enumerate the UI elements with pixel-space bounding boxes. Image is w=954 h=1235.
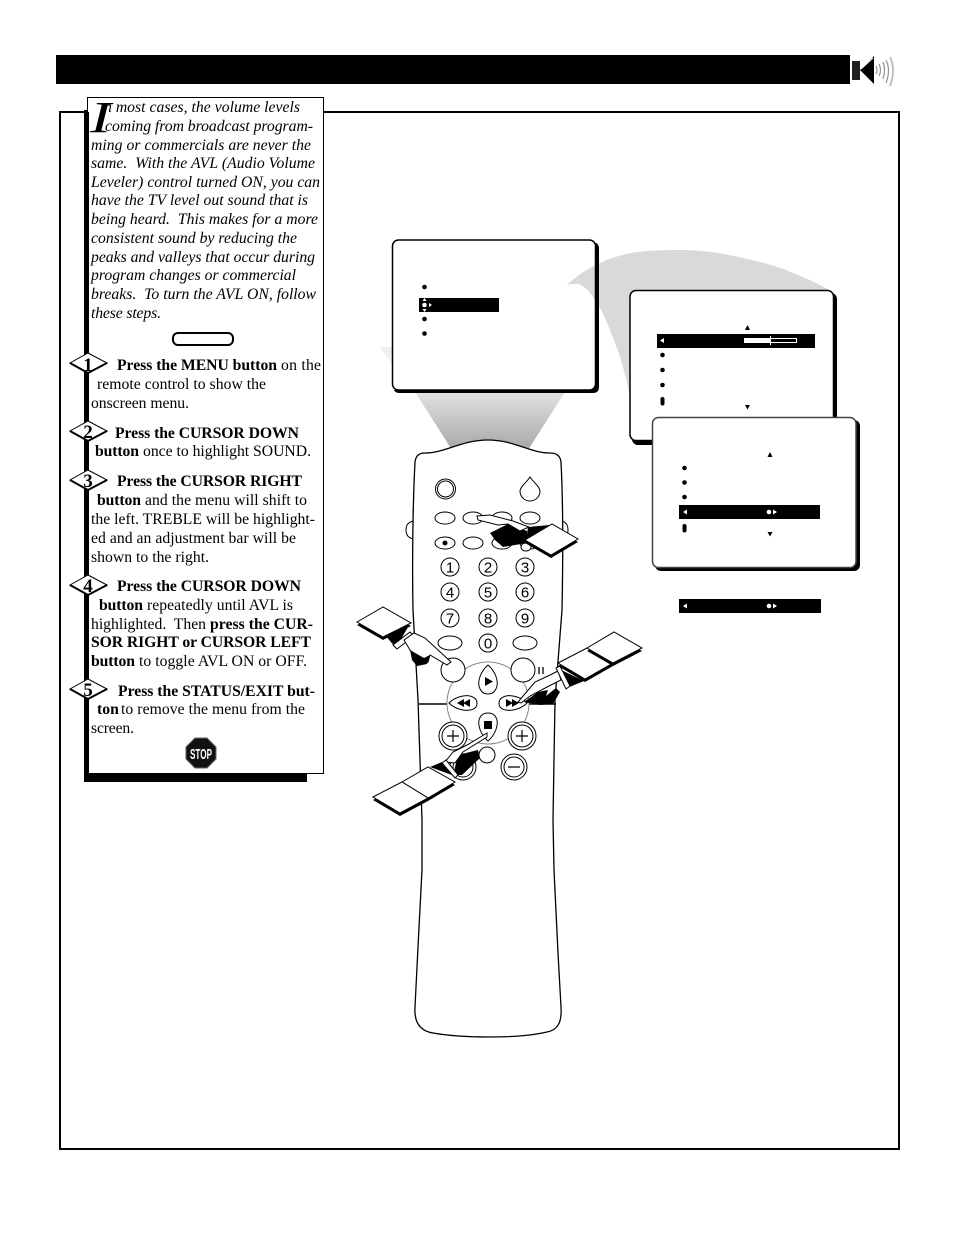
keypad digits [446,560,529,652]
step 3: Press the CURSOR RIGHT [117,473,303,490]
intro text: these steps. [91,305,161,322]
step 2: once to highlight SOUND. [143,443,311,460]
grey swoosh [567,250,832,430]
intro text [90,99,320,322]
keypad digits: 1 [446,560,454,576]
transport symbols [457,677,519,729]
step 1: 1 [83,355,93,376]
step 4: SOR RIGHT or CURSOR LEFT [91,634,312,651]
step 3: 3 [83,471,93,492]
step 3: button [97,492,141,509]
step 2: Press the CURSOR DOWN [115,425,300,442]
menu and status buttons [441,658,535,682]
intro text: breaks. To turn the AVL ON, follow [91,286,317,303]
step 3: shown to the right. [91,549,209,566]
keypad digits: 4 [446,584,454,602]
step 3: the left. TREBLE will be highlight- [91,511,315,528]
intro text: program changes or commercial [90,267,297,284]
step 5: 5 [83,680,93,701]
pause mark [539,667,543,674]
intro text: consistent sound by reducing the [91,230,297,247]
step 4: to toggle AVL ON or OFF. [139,653,307,670]
step 5: screen. [91,720,134,737]
step 2: button [95,443,139,460]
step 1: onscreen menu. [91,395,189,412]
cursor petals [449,665,527,741]
step 4: press the CUR- [210,616,313,633]
step 3: ed and an adjustment bar will be [91,530,296,547]
step 1: on the [281,357,321,374]
step 1 [70,353,321,412]
drop cap: I [89,93,114,142]
menu button pill [173,333,233,345]
icon: stop sign: STOP [190,746,212,763]
keypad digits: 3 [521,560,529,576]
projection beam [415,392,565,450]
step 5 [70,679,315,737]
step 4: Press the CURSOR DOWN [117,578,302,595]
cursor dial [447,662,529,744]
step 1: remote control to show the [97,376,266,393]
header bar [56,55,850,84]
panel: instructions [70,93,324,782]
step 4: repeatedly until AVL is [147,597,293,614]
screen 3: AVL menu [652,418,860,571]
intro text: have the TV level out sound that is [91,192,308,209]
icon: stop sign [186,738,216,768]
step 4: 4 [83,576,93,597]
keypad digits: 8 [484,610,492,628]
step 5: Press the STATUS/EXIT but- [118,683,315,700]
screen 2: treble menu [630,290,837,445]
step 4: button [99,597,143,614]
remote control [406,440,568,1037]
grey swoosh tail [380,347,392,364]
step 2: 2 [83,422,93,443]
number keypad [438,558,537,652]
step 4: button [91,653,135,670]
intro text: coming from broadcast program- [105,118,313,135]
step 2 [70,421,311,460]
hand: step 1 menu [477,515,578,558]
hand: step 4 cursor down [373,733,487,816]
keypad digits: 7 [446,610,454,628]
keypad digits: 2 [484,560,492,576]
icon: speaker [852,56,893,86]
step 3 [70,470,315,566]
keypad digits: 5 [484,584,492,602]
divider lines [419,703,556,705]
step 1: Press the MENU button [117,357,277,374]
intro text: being heard. This makes for a more [91,211,318,228]
page frame [60,112,899,1149]
intro text: peaks and valleys that occur during [90,249,315,266]
step 5: to remove the menu from the [121,701,305,718]
hand: step 3 cursor right [518,632,642,705]
step 4 [70,575,313,670]
intro text: n most cases, the volume levels [104,99,300,116]
hand: step 2 cursor down [357,607,451,666]
remote body [413,440,563,1037]
step 4: highlighted. Then [91,616,206,633]
AVL highlight bar [679,599,821,613]
step 3: and the menu will shift to [145,492,307,509]
keypad digits: 9 [521,610,529,628]
keypad digits: 6 [521,584,529,602]
top buttons [435,477,540,549]
plus and minus signs [447,730,528,767]
intro text: Leveler) control turned ON, you can [90,174,320,191]
keypad digits: 0 [484,636,492,652]
screen 1: main menu [392,240,599,393]
step 5: ton [97,701,119,718]
intro text: same. With the AVL (Audio Volume [91,155,315,172]
side nubs [406,510,568,551]
volume and channel keys [439,722,536,780]
intro text: ming or commercials are never the [91,137,311,154]
